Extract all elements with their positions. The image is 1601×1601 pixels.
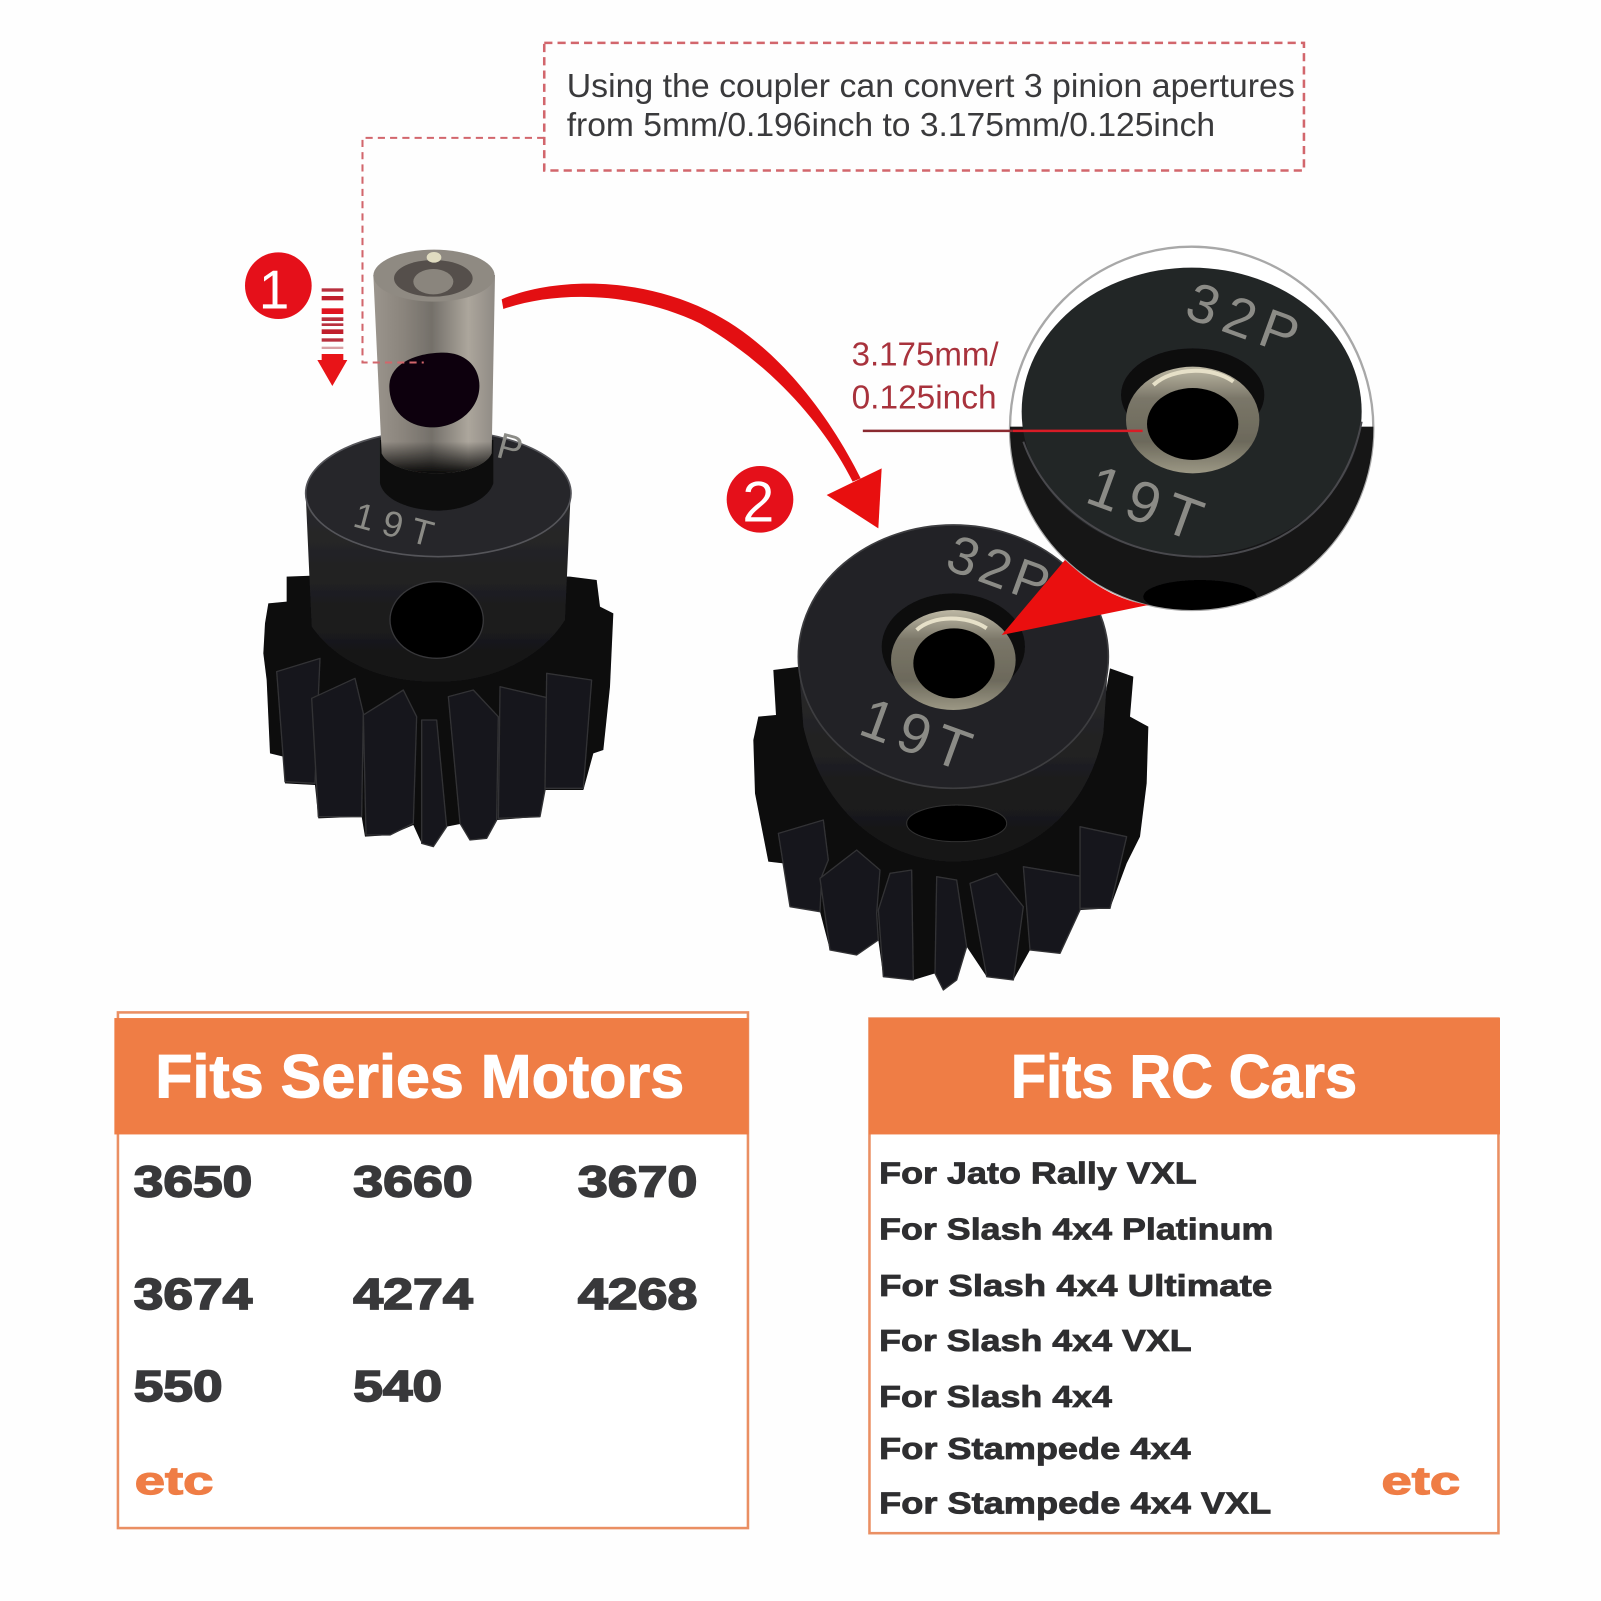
zoom inset of the gear bore: [1007, 247, 1377, 613]
gear body: 19T: [350, 494, 447, 557]
heading: fits series motors: [114, 1018, 748, 1134]
callout: coupler note: from 5mm/0.196inch to 3.175mm/0.125inch: [567, 107, 1215, 144]
car list: For Slash 4x4 VXL: [879, 1324, 1192, 1358]
red pointer from gear to inset: [1002, 560, 1148, 635]
motor numbers: 3670: [578, 1158, 697, 1207]
step 2 badge: [727, 466, 793, 535]
motor numbers: 4274: [353, 1270, 473, 1319]
heading: fits rc cars: Fits RC Cars: [1011, 1043, 1357, 1111]
motor numbers: 3674: [134, 1270, 253, 1319]
left gear with coupler: [263, 250, 613, 847]
coupler tube: [373, 250, 495, 473]
car list: For Slash 4x4: [879, 1380, 1112, 1414]
right gear: 19T: [852, 686, 986, 786]
car list: For Slash 4x4 Ultimate: [879, 1269, 1272, 1303]
heading: fits rc cars: [869, 1018, 1500, 1134]
curved arrow to step 2: [502, 284, 882, 528]
car list: For Jato Rally VXL: [879, 1156, 1197, 1190]
bore size label: [852, 337, 1143, 431]
callout: coupler note: [544, 43, 1304, 171]
gear body: [263, 425, 613, 847]
car list: For Stampede 4x4: [879, 1432, 1191, 1466]
inset gear face: [1007, 268, 1377, 613]
motor numbers: 3660: [353, 1158, 473, 1207]
right gear: 32P: [939, 524, 1062, 617]
step 1 badge: 1: [259, 258, 289, 320]
car list: [879, 1156, 1273, 1520]
motor numbers: 540: [353, 1362, 442, 1411]
dashed connector line: [362, 138, 544, 362]
insertion arrow down: [317, 288, 347, 386]
panel: fits rc cars: [869, 1018, 1500, 1533]
right gear: [753, 524, 1148, 990]
motor numbers: [134, 1158, 697, 1411]
step 2 badge: 2: [742, 471, 774, 535]
callout: coupler note: Using the coupler can convert 3 pinion apertures: [567, 68, 1295, 105]
etc label: etc: [1382, 1460, 1460, 1503]
gear body: P: [493, 425, 527, 471]
inset gear face: 19T: [1079, 453, 1219, 557]
heading: fits series motors: Fits Series Motors: [155, 1043, 684, 1111]
panel: fits series motors: [114, 1012, 748, 1528]
motor numbers: 3650: [134, 1158, 252, 1207]
inset gear face: 32P: [1179, 270, 1315, 370]
car list: For Stampede 4x4 VXL: [879, 1486, 1271, 1520]
car list: For Slash 4x4 Platinum: [879, 1213, 1273, 1247]
etc label: etc: [135, 1460, 213, 1503]
motor numbers: 550: [134, 1362, 223, 1411]
bore size label: 0.125inch: [852, 379, 997, 416]
step 1 badge: [245, 252, 312, 320]
bore size label: 3.175mm/: [852, 337, 999, 374]
motor numbers: 4268: [578, 1270, 697, 1319]
